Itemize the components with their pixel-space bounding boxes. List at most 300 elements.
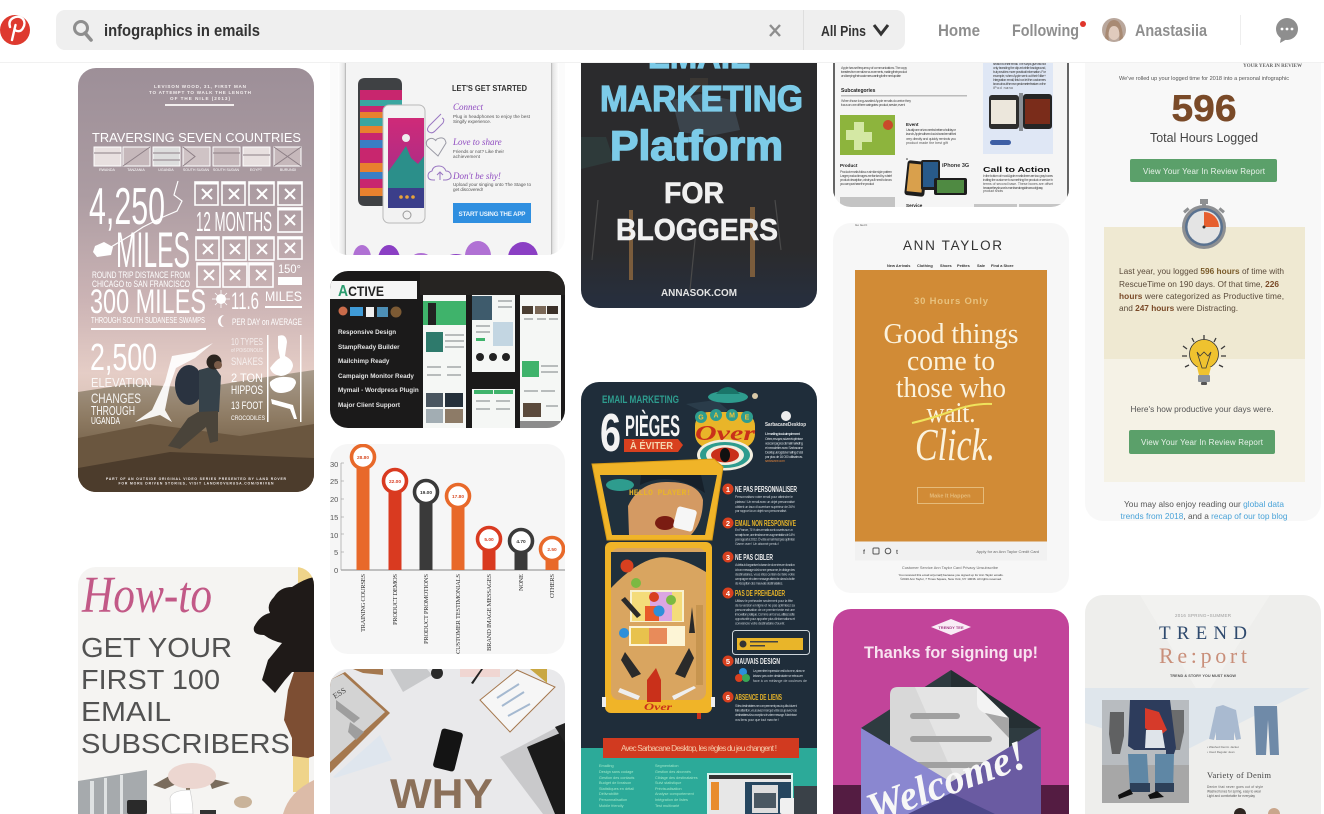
tip 6: Si les destinataires ne comprennent pas à qui ils doivent	[735, 704, 797, 708]
tip 2: EMAIL NON RESPONSIVE	[735, 519, 796, 528]
sarbacane desktop blurb: vos campagnes d'email marketing	[765, 442, 803, 446]
waterfall drawing	[135, 343, 213, 422]
social footer strip: Apply for an Ann Taylor Credit Card	[976, 549, 1039, 554]
nav links: Shoes	[940, 263, 952, 268]
footer caption	[106, 477, 287, 486]
subtitle: TREND & STORY YOU MUST KNOW	[1170, 674, 1236, 678]
stat: 2,500 ft elevation: UGANDA	[91, 416, 120, 427]
product text: Larger product images are flanked by a brief	[840, 174, 892, 178]
checklist: Test multivarié	[655, 804, 679, 808]
bottom teal band	[581, 748, 817, 814]
sarbacane desktop blurb: et newsletter avec Sarbacane	[765, 446, 803, 450]
title block: EMAIL MARKETING	[602, 394, 679, 406]
stat: 2,500 ft elevation: 2,500	[90, 337, 157, 379]
value labels: 28.80	[357, 455, 369, 461]
panel: active email template	[330, 271, 565, 428]
heading: variety of denim: Variety of Denim	[1207, 770, 1271, 780]
search query: infographics in emails	[104, 21, 260, 40]
stat: 11.6 miles per day	[212, 288, 302, 328]
y axis: 15	[330, 513, 338, 522]
value labels	[357, 455, 557, 553]
tip 6: vos liens pour que tout marche !	[735, 718, 779, 722]
nav links: Petites	[957, 263, 970, 268]
category labels: OTHERS	[549, 574, 556, 598]
search box	[56, 10, 905, 50]
red banner: Avec Sarbacane Desktop, les règles du jeu changent !	[621, 744, 777, 753]
background person at desk	[581, 78, 781, 290]
cream block	[1104, 359, 1305, 482]
footer thumbnails	[840, 197, 1064, 209]
left text blocks: transfers from email announcements, making their product	[841, 70, 907, 74]
footer links and fine print: Customer Service Ann Taylor Card Privacy Unsubscribe	[902, 565, 998, 570]
tip 1	[722, 484, 797, 513]
woman face and hair	[254, 577, 314, 814]
filter: all pins: All Pins	[821, 24, 866, 40]
footer caption: PART OF AN OUTSIDE ORIGINAL VIDEO SERIES PRESENTED BY LAND ROVER	[106, 477, 287, 481]
checklist: Gestion des contacts	[599, 776, 635, 780]
logo: active	[330, 281, 417, 300]
flag captions: SOUTH SUDAN	[183, 168, 209, 172]
tip 5: laissez pas votre destinataire se retrouver	[753, 674, 804, 678]
tip 6: faire attention, vous avez manqué votre coup avec vos	[735, 708, 797, 712]
serif headline	[884, 319, 1018, 429]
step: dont be shy: get discovered!	[453, 187, 483, 192]
bars	[356, 468, 558, 570]
serif headline: come to	[907, 346, 995, 377]
stat: 11.6 miles per day: MILES	[265, 288, 302, 304]
social footer strip: f	[863, 550, 866, 556]
tip 5: 5	[726, 657, 730, 666]
productive line: Here's how productive your days were.	[1130, 404, 1274, 414]
letter paper	[890, 687, 1009, 790]
y axis: 25	[330, 477, 338, 486]
small kicker: 30 Hours Only	[914, 296, 989, 307]
product text: product description, what you'll need to know	[840, 178, 892, 182]
laptop	[500, 723, 565, 814]
category labels	[360, 574, 556, 654]
nav: username: Anastasiia	[1135, 21, 1207, 40]
stat: animals column: 2 TON	[231, 371, 263, 385]
panel: ann taylor good things email	[833, 223, 1069, 593]
panel: email marketing platform for bloggers	[581, 20, 817, 308]
panel: why desk photo	[330, 667, 565, 814]
stat: 150 degrees	[278, 264, 302, 285]
call to action: product shots	[983, 189, 1003, 193]
product text: Product emails follow a similar style pattern	[840, 170, 892, 174]
heading: email (cut): EMAIL	[648, 35, 750, 76]
tip 3: de réception des mauvais destinataires.	[735, 582, 783, 586]
country flags row	[94, 147, 301, 166]
tip 1: NE PAS PERSONNALISER	[735, 485, 797, 494]
feature list: Mymail - Wordpress Plugin	[338, 387, 419, 394]
checklist: Budget de livraison	[599, 781, 631, 785]
stat: 4,250 miles: CHICAGO to SAN FRANCISCO	[92, 279, 190, 289]
tip 2: Game over ! Un abonné perdu !	[735, 542, 779, 546]
sarbacane desktop blurb: SarbacaneDesktop	[765, 422, 806, 428]
service icons	[338, 306, 402, 318]
panel: six pieges pinball infographic	[581, 382, 817, 814]
preheader mock inbox	[732, 630, 810, 654]
flag captions: UGANDA	[158, 168, 174, 172]
panel: pin landscape traverse infographic: MILES	[116, 222, 190, 278]
call to action	[983, 165, 1053, 193]
step: love to share	[426, 137, 504, 159]
tip 3: destinataires, vous êtes certain de faire votre	[735, 572, 795, 576]
tip 1: Personnalisez votre email pour atteindre le	[735, 495, 793, 499]
value labels: 17.80	[452, 494, 464, 500]
stat: animals column: 13 FOOT	[231, 400, 263, 412]
panel: apple email breakdown	[833, 20, 1069, 209]
checklist: Intégration de listes	[655, 798, 688, 802]
nav links: Find a Store	[991, 263, 1014, 268]
tip 5: face à un mélange de couleurs de	[753, 679, 807, 683]
y axis: 30	[330, 460, 338, 469]
orange hero	[855, 270, 1047, 542]
stat: 2,500 ft elevation: ELEVATION	[91, 375, 152, 390]
intro caption: TO ATTEMPT TO WALK THE LENGTH	[149, 90, 252, 95]
tip 4: innovation pratique. Comme un bonus, utilisez cette	[735, 612, 795, 616]
calendar crossed boxes: 12 months	[195, 182, 302, 287]
headline text: SUBSCRIBERS	[81, 728, 290, 759]
flag captions: EGYPT	[250, 168, 263, 172]
category labels: PRODUCT PROMOTIONS	[423, 574, 430, 644]
headline text	[81, 632, 290, 759]
stat: 4,250 miles: ROUND TRIP DISTANCE FROM	[92, 270, 190, 280]
blue highlight panel: know about the new pedometer feature on the	[993, 82, 1046, 86]
tip 4	[722, 588, 795, 626]
icon: magnifier	[74, 22, 91, 40]
call to action: inviting the customer to something the product or service in	[983, 178, 1053, 182]
call to action: In the bottom of most Apple emails there are two gray boxes	[983, 174, 1053, 178]
panel: how to get your first 100 email subscribers	[78, 567, 314, 814]
feature list: StampReady Builder	[338, 344, 400, 351]
green button 1: View Your Year In Review Report	[1143, 167, 1266, 176]
tip 4: 4	[726, 589, 731, 598]
stat: 300 miles: THROUGH SOUTH SUDANESE SWAMPS	[91, 316, 205, 325]
tip 1: obtient un taux d'ouverture supérieur de 26%	[735, 505, 795, 509]
step: dont be shy	[428, 166, 531, 192]
blue highlight panel: Integration email, this box let the customers	[993, 78, 1046, 82]
sarbacane desktop blurb	[765, 411, 806, 463]
red banner	[603, 738, 799, 758]
title block: 6	[600, 403, 621, 463]
title block	[600, 394, 683, 463]
iphones image	[904, 158, 969, 197]
product text: you can purchase the product	[840, 182, 874, 186]
green button 1	[1130, 159, 1277, 182]
tip 2	[722, 518, 796, 546]
call to action: Call to Action	[983, 165, 1050, 174]
checklist: Personnalisation	[599, 798, 627, 802]
sarbacane desktop blurb: Desktop, le logiciel emailing choisi	[765, 450, 803, 454]
beige block	[1104, 227, 1305, 359]
stat: 2,500 ft elevation	[91, 344, 156, 424]
hiker with backpack	[168, 354, 222, 449]
sarbacane desktop blurb: L'emailing tout-simplement	[765, 432, 801, 436]
denim copy	[1207, 785, 1263, 798]
step: connect	[428, 102, 531, 133]
heading: traversing seven countries: TRAVERSING SEVEN COUNTRIES	[92, 130, 301, 145]
sarbacane desktop blurb: sarbacane.com	[765, 459, 785, 463]
phone: black android	[358, 78, 402, 206]
script heading: how-to: How-to	[81, 567, 212, 624]
logo: active: ACTIVE	[338, 283, 384, 300]
tip 3: NE PAS CIBLER	[735, 553, 773, 562]
stat: animals column: HIPPOS	[231, 383, 263, 397]
title block: À ÉVITER	[630, 439, 673, 452]
step: love to share: achievement	[453, 154, 481, 159]
event text: product made the best gift	[906, 141, 948, 145]
tip 5	[722, 656, 807, 683]
stat: animals column: of POISONOUS	[231, 348, 264, 354]
value circles	[352, 446, 564, 560]
nav links: Sale	[977, 263, 986, 268]
stat: 4,250 miles	[89, 178, 190, 289]
footer links and fine print: ©2016 Ann Taylor, 7 Times Square, New York, NY 10036. All rights reserved.	[900, 577, 1002, 581]
heading: bloggers: BLOGGERS	[616, 212, 778, 247]
checklist: Gestion des abonnés	[655, 770, 691, 774]
nav links	[887, 263, 1014, 268]
tip 4: opportunité pour apporter plus d'informations et	[735, 617, 795, 621]
heading: LET'S GET STARTED	[452, 83, 527, 93]
step: love to share: Love to share	[452, 137, 502, 147]
checklist: Délivrabilité	[599, 792, 619, 796]
step: dont be shy: Don't be shy!	[452, 171, 501, 181]
closing links: trends from 2018, and a recap of our top blog	[1120, 511, 1288, 521]
y axis: 20	[330, 495, 338, 504]
tip 5: La première impression est la bonne, alors ne	[753, 669, 805, 673]
heading: platform: Platform	[610, 122, 783, 169]
heading: for: FOR	[664, 177, 724, 210]
category labels: PRODUCT DEMOS	[392, 574, 399, 625]
tip 2: smartphone, une tendance en augmentation de 14%	[735, 533, 795, 537]
tip 4: de la version en ligne et ne pas optimisez sa	[735, 604, 795, 608]
step: connect: Singify experience.	[453, 119, 491, 124]
left text blocks: focus on one of three categories: product, service, event	[841, 103, 905, 107]
tip 3: à bon message à la bonne personne, le ciblage des	[735, 568, 795, 572]
badge	[931, 619, 971, 635]
tip 3: A défaut d'organiser la base de données en fonction	[735, 563, 795, 567]
tip 3: campagne et votre message atteindre dans la boîte	[735, 577, 795, 581]
footer links and fine print	[899, 565, 1004, 581]
event text: very directly and quickly reminds you	[906, 137, 956, 141]
small heading: YOUR YEAR IN REVIEW	[1243, 64, 1302, 69]
sarbacane desktop blurb: par plus de 16 000 utilisateurs.	[765, 455, 803, 459]
tip 3	[722, 552, 795, 586]
template preview column 2	[472, 295, 515, 428]
denim copy: Washed tones for spring, easy to wear	[1207, 790, 1262, 794]
tip 6	[722, 692, 797, 722]
flag captions: TANZANIA	[127, 168, 145, 172]
summary paragraph: hours were categorized as Productive time,	[1119, 291, 1284, 301]
value labels: 2.50	[547, 547, 557, 553]
tip 1: plateau ! Un email avec un objet personnalisé	[735, 500, 795, 504]
icon: pinterest logo	[0, 15, 30, 45]
product text: Product	[840, 163, 858, 168]
footer links and fine print: You received this email at [email] because you signed up for Ann Taylor emails.	[899, 573, 1004, 577]
social footer strip: t	[896, 550, 898, 556]
badge: TRENDY TEE	[938, 625, 964, 630]
serif headline: those who	[896, 373, 1006, 404]
tip 4: Utilisez le preheader seulement pour la fête	[735, 599, 793, 603]
template preview column 3	[520, 295, 561, 428]
feature list: Major Client Support	[338, 402, 401, 409]
tip 6: 6	[726, 693, 730, 702]
stat: 4,250 miles: 4,250	[89, 178, 165, 236]
feature list	[338, 329, 419, 409]
game over sign with ufo: G	[698, 414, 704, 422]
product captions	[1207, 745, 1239, 754]
game over sign with ufo	[686, 387, 758, 470]
event text: Event	[906, 122, 919, 127]
iphones image: iPhone 3G	[942, 163, 969, 169]
value labels: 4.70	[516, 539, 526, 545]
heading: marketing: MARKETING	[600, 78, 803, 119]
product captions: • Washed Denim Jacket	[1207, 745, 1239, 749]
category labels: CUSTOMER TESTIMONIALS	[455, 574, 462, 654]
stat: 2,500 ft elevation: CHANGES	[91, 390, 141, 406]
header bar	[0, 0, 1324, 63]
blue highlight panel: iPod nano	[993, 86, 1013, 90]
avatar	[1102, 18, 1126, 42]
nav: following: Following	[1012, 21, 1079, 40]
step: connect: Plug in headphones to enjoy the best	[453, 114, 531, 119]
denim jeans	[1254, 706, 1279, 755]
footer caption: FOR MORE DRIVEN STORIES, VISIT LANDROVERUSA.COM/DRIVEN	[118, 482, 274, 486]
icon: chevron	[874, 25, 888, 34]
call to action: because they show a human face alongside a row of glossy	[983, 186, 1043, 190]
serif headline: Good things	[884, 319, 1018, 350]
big stat: 596: 596	[1172, 88, 1236, 129]
left text blocks: and keeping their customers wanting for the next update	[841, 74, 901, 78]
panel: lets get started app email	[340, 63, 557, 255]
headline text: GET YOUR	[81, 632, 232, 663]
stat label: Total Hours Logged	[1150, 130, 1258, 145]
summary paragraph: RescueTime on 190 days. Of that time, 226	[1119, 279, 1279, 289]
icon: chat bubble	[1276, 18, 1298, 43]
left text blocks: When those long-awaited Apple emails do arrive they	[841, 99, 911, 103]
blue highlight panel: only branding the clip art while background,	[993, 66, 1046, 70]
checklist: Emailing	[599, 764, 614, 768]
stat: animals column	[231, 335, 302, 422]
checklist: Segmentation	[655, 764, 678, 768]
feature list: Responsive Design	[338, 329, 396, 336]
purple blobs	[353, 241, 538, 255]
social footer strip	[855, 542, 1047, 560]
stat: animals column: CROCODILES	[231, 415, 266, 422]
value labels: 5.00	[484, 537, 494, 543]
summary paragraph: and 247 hours were Distracting.	[1119, 303, 1238, 313]
panel: year in review email	[1085, 20, 1321, 521]
icon: stopwatch	[1182, 199, 1226, 249]
clipboard with newspaper	[330, 672, 390, 773]
template preview column 1	[423, 295, 466, 428]
closing links	[1120, 499, 1288, 521]
flag captions: BURUNDI	[280, 168, 296, 172]
step: love to share: Friends or not? Like their	[453, 149, 504, 154]
value labels: 22.00	[389, 479, 401, 485]
y axis: 10	[330, 531, 338, 540]
game over sign with ufo: Over	[695, 421, 756, 445]
tip 3: 3	[726, 553, 730, 562]
intro line: We've rolled up your logged time for 2018 into a personal infographic	[1119, 76, 1289, 82]
title: trend: TREND	[1159, 623, 1247, 644]
game over sign with ufo: E	[745, 414, 750, 422]
tip 6: destinataires à la conception de votre message. Maximisez	[735, 713, 797, 717]
checklist: Prévisualisation	[655, 787, 682, 791]
intro caption	[149, 84, 252, 106]
checklist: Analyse comportement	[655, 792, 695, 796]
stat: animals column: SNAKES	[231, 356, 263, 368]
tip 2: 2	[726, 519, 730, 528]
y axis	[330, 460, 565, 575]
feature list: Mailchimp Ready	[338, 358, 390, 365]
tip 4: PAS DE PREHEADER	[735, 589, 785, 598]
left text blocks: Apple has set frequency of communications. The copy	[841, 66, 907, 70]
checklist	[599, 764, 698, 808]
green button 2: View Your Year In Review Report	[1141, 438, 1264, 447]
stat: 11.6 miles per day: PER DAY on AVERAGE	[232, 317, 302, 328]
checklist: Statistiques en détail	[599, 787, 634, 791]
checklist: Mobile friendly	[599, 804, 624, 808]
arcade cabinet pinball table	[602, 542, 715, 719]
denim copy: Denim that never goes out of style	[1207, 785, 1263, 789]
panel: bar chart card	[330, 444, 565, 654]
clipboard with newspaper: ESS	[331, 686, 348, 701]
tip 6: ABSENCE DE LIENS	[735, 693, 782, 702]
flag captions: SOUTH SUDAN	[213, 168, 239, 172]
outline button	[918, 488, 984, 504]
stat: 150 degrees: 150°	[278, 262, 301, 276]
sarbacane desktop blurb: Créez, envoyez, suivez et optimisez	[765, 437, 803, 441]
denim jacket	[1209, 705, 1241, 740]
icon: light bulb	[1182, 335, 1226, 385]
checklist: Design sans codage	[599, 770, 633, 774]
closing links: You may also enjoy reading our global data	[1124, 499, 1284, 509]
flag captions	[99, 168, 296, 171]
panel: trend report email	[1085, 595, 1321, 814]
tip 2: En France, 71% des emails sont ouverts sur un	[735, 528, 793, 532]
logo: ann taylor: ANN TAYLOR	[903, 238, 1002, 253]
checklist: Suivi statistique	[655, 781, 681, 785]
stat: animals column: 10 TYPES	[231, 337, 263, 348]
pale blue diagonal band	[1085, 688, 1310, 753]
category labels: BRAND IMAGE MESSAGES	[486, 574, 493, 651]
models at bottom	[1234, 808, 1280, 814]
category labels: TRAINING COURSES	[360, 574, 367, 632]
stat: 300 miles: 300 MILES	[90, 283, 206, 321]
denim copy: Light and comfortable for everyday	[1207, 794, 1255, 798]
tip 4: convaincre votre destinataire d'ouvrir.	[735, 622, 785, 626]
desk with laptop and flowers	[78, 763, 252, 814]
street style photo	[1102, 700, 1189, 803]
blue highlight panel: section to their email. The Maps give last not	[993, 62, 1046, 66]
panel: thanks for signing up welcome	[833, 609, 1069, 814]
game over sign with ufo: A	[713, 412, 719, 420]
footer thumbnails: Service	[906, 203, 923, 208]
event text: Usually one or two weeks before a holiday or	[906, 128, 957, 132]
stat: 11.6 miles per day: 11.6	[231, 288, 259, 315]
site url: ANNASOK.COM	[661, 287, 737, 299]
button: start using the app: START USING THE APP	[458, 211, 526, 218]
arcade cabinet screen	[592, 459, 723, 540]
call to action: terms of second base. These boxes are offset	[983, 182, 1053, 186]
left text blocks	[841, 66, 967, 107]
button: start using the app	[453, 203, 531, 223]
yellow strikethrough	[912, 404, 992, 423]
product text	[840, 163, 892, 186]
panel: pin landscape traverse infographic	[78, 68, 314, 492]
